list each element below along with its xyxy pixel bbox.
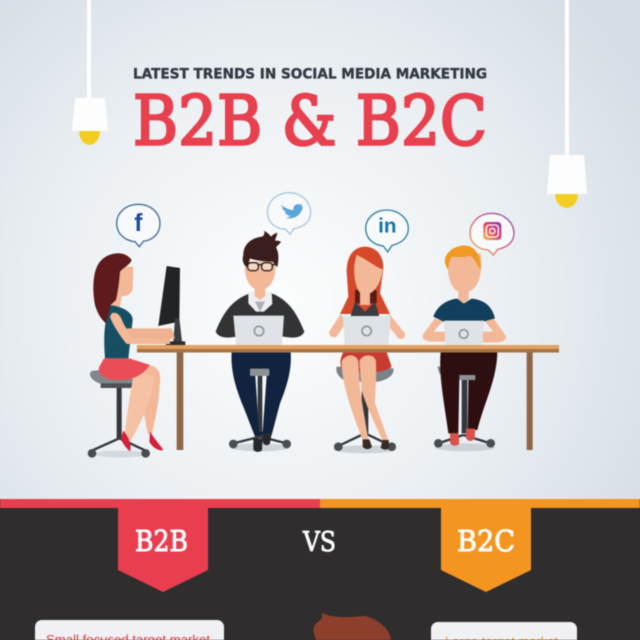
head and neck	[448, 253, 481, 303]
t-shirt	[433, 299, 495, 322]
table left leg	[177, 352, 183, 450]
speech bubble: facebook	[117, 204, 160, 247]
red heels	[121, 431, 163, 452]
speech bubble: instagram	[470, 213, 514, 255]
legs	[342, 355, 368, 440]
VS label: VS	[302, 527, 336, 558]
card: B2C point	[431, 622, 577, 640]
shirt collar and tie	[248, 292, 272, 312]
face and neck	[354, 255, 383, 305]
banner: B2B	[118, 508, 208, 592]
table right leg	[527, 352, 533, 450]
divider bar red	[0, 499, 320, 508]
subtitle: LATEST TRENDS IN SOCIAL MEDIA MARKETING	[133, 66, 487, 82]
stool	[88, 370, 150, 458]
central figure hair	[314, 613, 391, 640]
red shoes	[450, 429, 475, 446]
stool seat	[459, 375, 475, 380]
sweater	[216, 293, 304, 338]
stool	[229, 373, 291, 451]
hair	[93, 253, 132, 323]
team illustration right half	[329, 210, 533, 453]
spiky hair	[243, 231, 281, 267]
top	[351, 302, 379, 316]
speech bubble: linkedin: in	[378, 215, 397, 238]
trousers	[232, 352, 291, 437]
speech bubble: linkedin	[366, 210, 408, 252]
divider bar orange	[320, 499, 640, 508]
laptop three	[444, 321, 484, 345]
man with orange hair	[423, 246, 506, 451]
banner: B2C: B2C	[457, 524, 515, 558]
arms	[423, 318, 506, 342]
stool	[434, 367, 495, 451]
head	[112, 267, 133, 307]
laptop two	[343, 316, 391, 345]
left hanging lamp	[72, 0, 108, 145]
stool seat	[250, 369, 269, 376]
orange hair	[445, 246, 481, 270]
red hair	[340, 247, 390, 314]
shoes	[253, 433, 272, 452]
skirt	[99, 358, 150, 380]
woman with red hair	[329, 247, 405, 453]
dark inner hair	[355, 290, 377, 303]
trousers	[440, 352, 497, 433]
desk top	[137, 345, 559, 352]
skirt	[340, 352, 392, 373]
torso	[104, 305, 133, 358]
team illustration left half	[88, 193, 311, 458]
laptop one	[233, 316, 284, 345]
dark section	[0, 508, 640, 640]
stool	[333, 367, 397, 453]
card: B2B point	[35, 620, 224, 640]
banner: B2B: B2B	[135, 524, 188, 558]
man with glasses	[216, 231, 304, 452]
arms	[329, 314, 405, 339]
legs	[137, 365, 160, 435]
glasses	[245, 263, 275, 271]
background	[0, 0, 640, 499]
right hanging lamp	[547, 0, 587, 208]
woman at monitor	[88, 253, 185, 458]
arms	[127, 328, 175, 344]
speech bubble: facebook: f	[134, 210, 143, 237]
neck and face	[245, 262, 275, 300]
title: B2B & B2C	[133, 82, 487, 162]
speech bubble: twitter	[267, 193, 311, 234]
shoes	[363, 439, 389, 450]
banner: B2C	[441, 508, 531, 592]
monitor	[158, 266, 180, 326]
